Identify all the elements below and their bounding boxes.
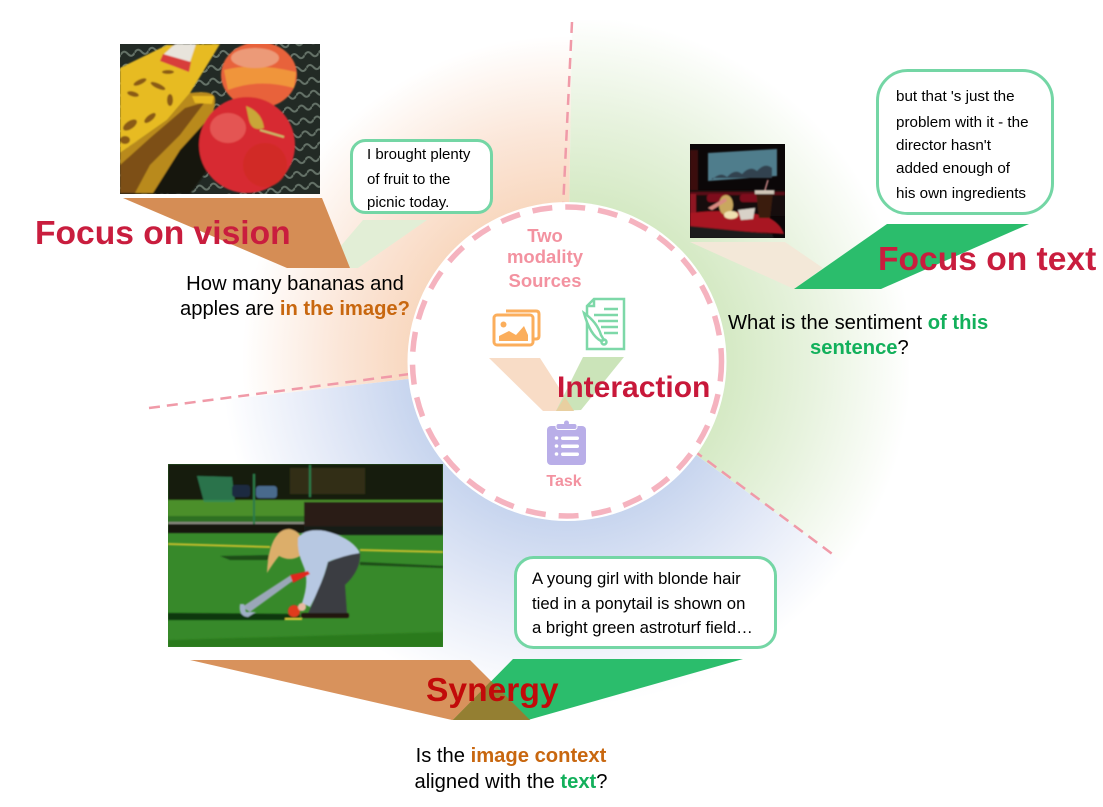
divider: left dashed line <box>149 374 410 408</box>
heading: focus on vision: Focus on vision <box>35 215 291 252</box>
panel: focus on text <box>690 70 1096 359</box>
text bubble: caption: tied in a ponytail is shown on <box>532 594 745 613</box>
photo: bananas and apples <box>120 42 320 194</box>
text bubble: caption: a bright green astroturf field… <box>532 618 753 637</box>
text bubble: caption <box>516 558 776 648</box>
funnel: text contribution <box>453 659 743 720</box>
panel: focus on vision <box>35 42 492 320</box>
text bubble: director sentence: but that 's just the <box>896 88 1015 105</box>
question: image context: Is the image context <box>416 745 606 767</box>
text bubble: picnic sentence: picnic today. <box>367 194 449 211</box>
icon: task clipboard <box>547 420 586 465</box>
icon: document with quill <box>584 299 624 349</box>
background sector: synergy <box>100 361 909 720</box>
label: two modality sources: Sources <box>508 270 582 291</box>
heading: focus on text: Focus on text <box>878 241 1096 278</box>
funnel: image contribution <box>190 660 530 720</box>
background sector: vision <box>100 20 572 414</box>
text bubble: director sentence: director hasn't <box>896 137 992 154</box>
divider: right dashed line <box>693 450 835 556</box>
question: bananas and apples: How many bananas and <box>186 273 404 295</box>
text bubble: director sentence: problem with it - the <box>896 114 1029 131</box>
text bubble: picnic sentence <box>352 140 492 212</box>
icon: image stack <box>494 311 539 345</box>
funnel: source overlap <box>556 397 574 411</box>
question: bananas and apples: apples are in the image? <box>180 298 410 320</box>
label: two modality sources: Two <box>527 225 563 246</box>
text bubble: director sentence: added enough of <box>896 160 1011 177</box>
funnel: overlap <box>453 681 530 720</box>
text bubble: picnic sentence: of fruit to the <box>367 171 450 188</box>
funnel: image source <box>489 358 574 411</box>
funnel: pale text contribution <box>322 220 427 268</box>
funnel: pale image contribution <box>690 242 823 289</box>
funnel: text contribution <box>794 224 1029 289</box>
photo: girl playing field hockey <box>168 464 443 647</box>
question: sentiment: sentence? <box>810 337 909 359</box>
text bubble: picnic sentence: I brought plenty <box>367 146 471 163</box>
panel: central interaction circle <box>408 202 726 521</box>
question: image context: aligned with the text? <box>414 771 608 793</box>
funnel: image contribution <box>123 198 350 268</box>
text bubble: director sentence <box>878 70 1052 214</box>
divider: top dashed line <box>563 22 572 208</box>
text bubble: director sentence: his own ingredients <box>896 185 1026 202</box>
text bubble: caption: A young girl with blonde hair <box>532 569 741 588</box>
photo: cinema with popcorn <box>690 144 785 238</box>
heading: synergy: Synergy <box>426 672 559 709</box>
heading: interaction: Interaction <box>557 371 710 404</box>
background sector: text <box>567 20 909 610</box>
label: two modality sources: modality <box>507 246 584 267</box>
funnel: text source <box>556 357 624 411</box>
panel: synergy <box>168 464 776 793</box>
label: task: Task <box>546 473 582 490</box>
question: sentiment: What is the sentiment of this <box>728 312 988 334</box>
circle: white disc with dashed ring <box>408 202 726 521</box>
